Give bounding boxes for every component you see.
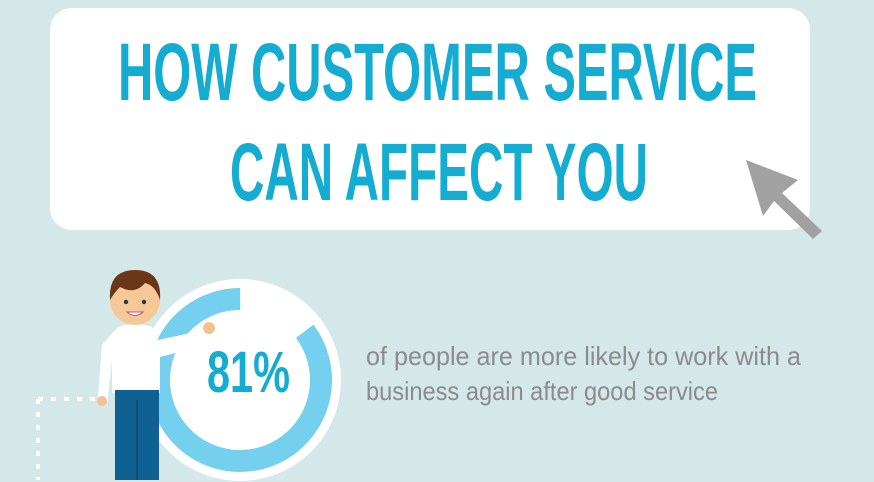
text: stat description: of people are more likely to work with a — [366, 341, 802, 371]
chart: 81% ring — [153, 279, 341, 481]
dotted path — [36, 397, 108, 480]
title box — [50, 8, 810, 230]
icon: cursor arrow — [746, 160, 822, 239]
text: stat description — [366, 341, 802, 406]
text: stat description: business again after good service — [366, 376, 718, 406]
person illustration — [97, 270, 215, 480]
stat 81%: 81% — [207, 340, 290, 405]
title — [118, 27, 757, 218]
